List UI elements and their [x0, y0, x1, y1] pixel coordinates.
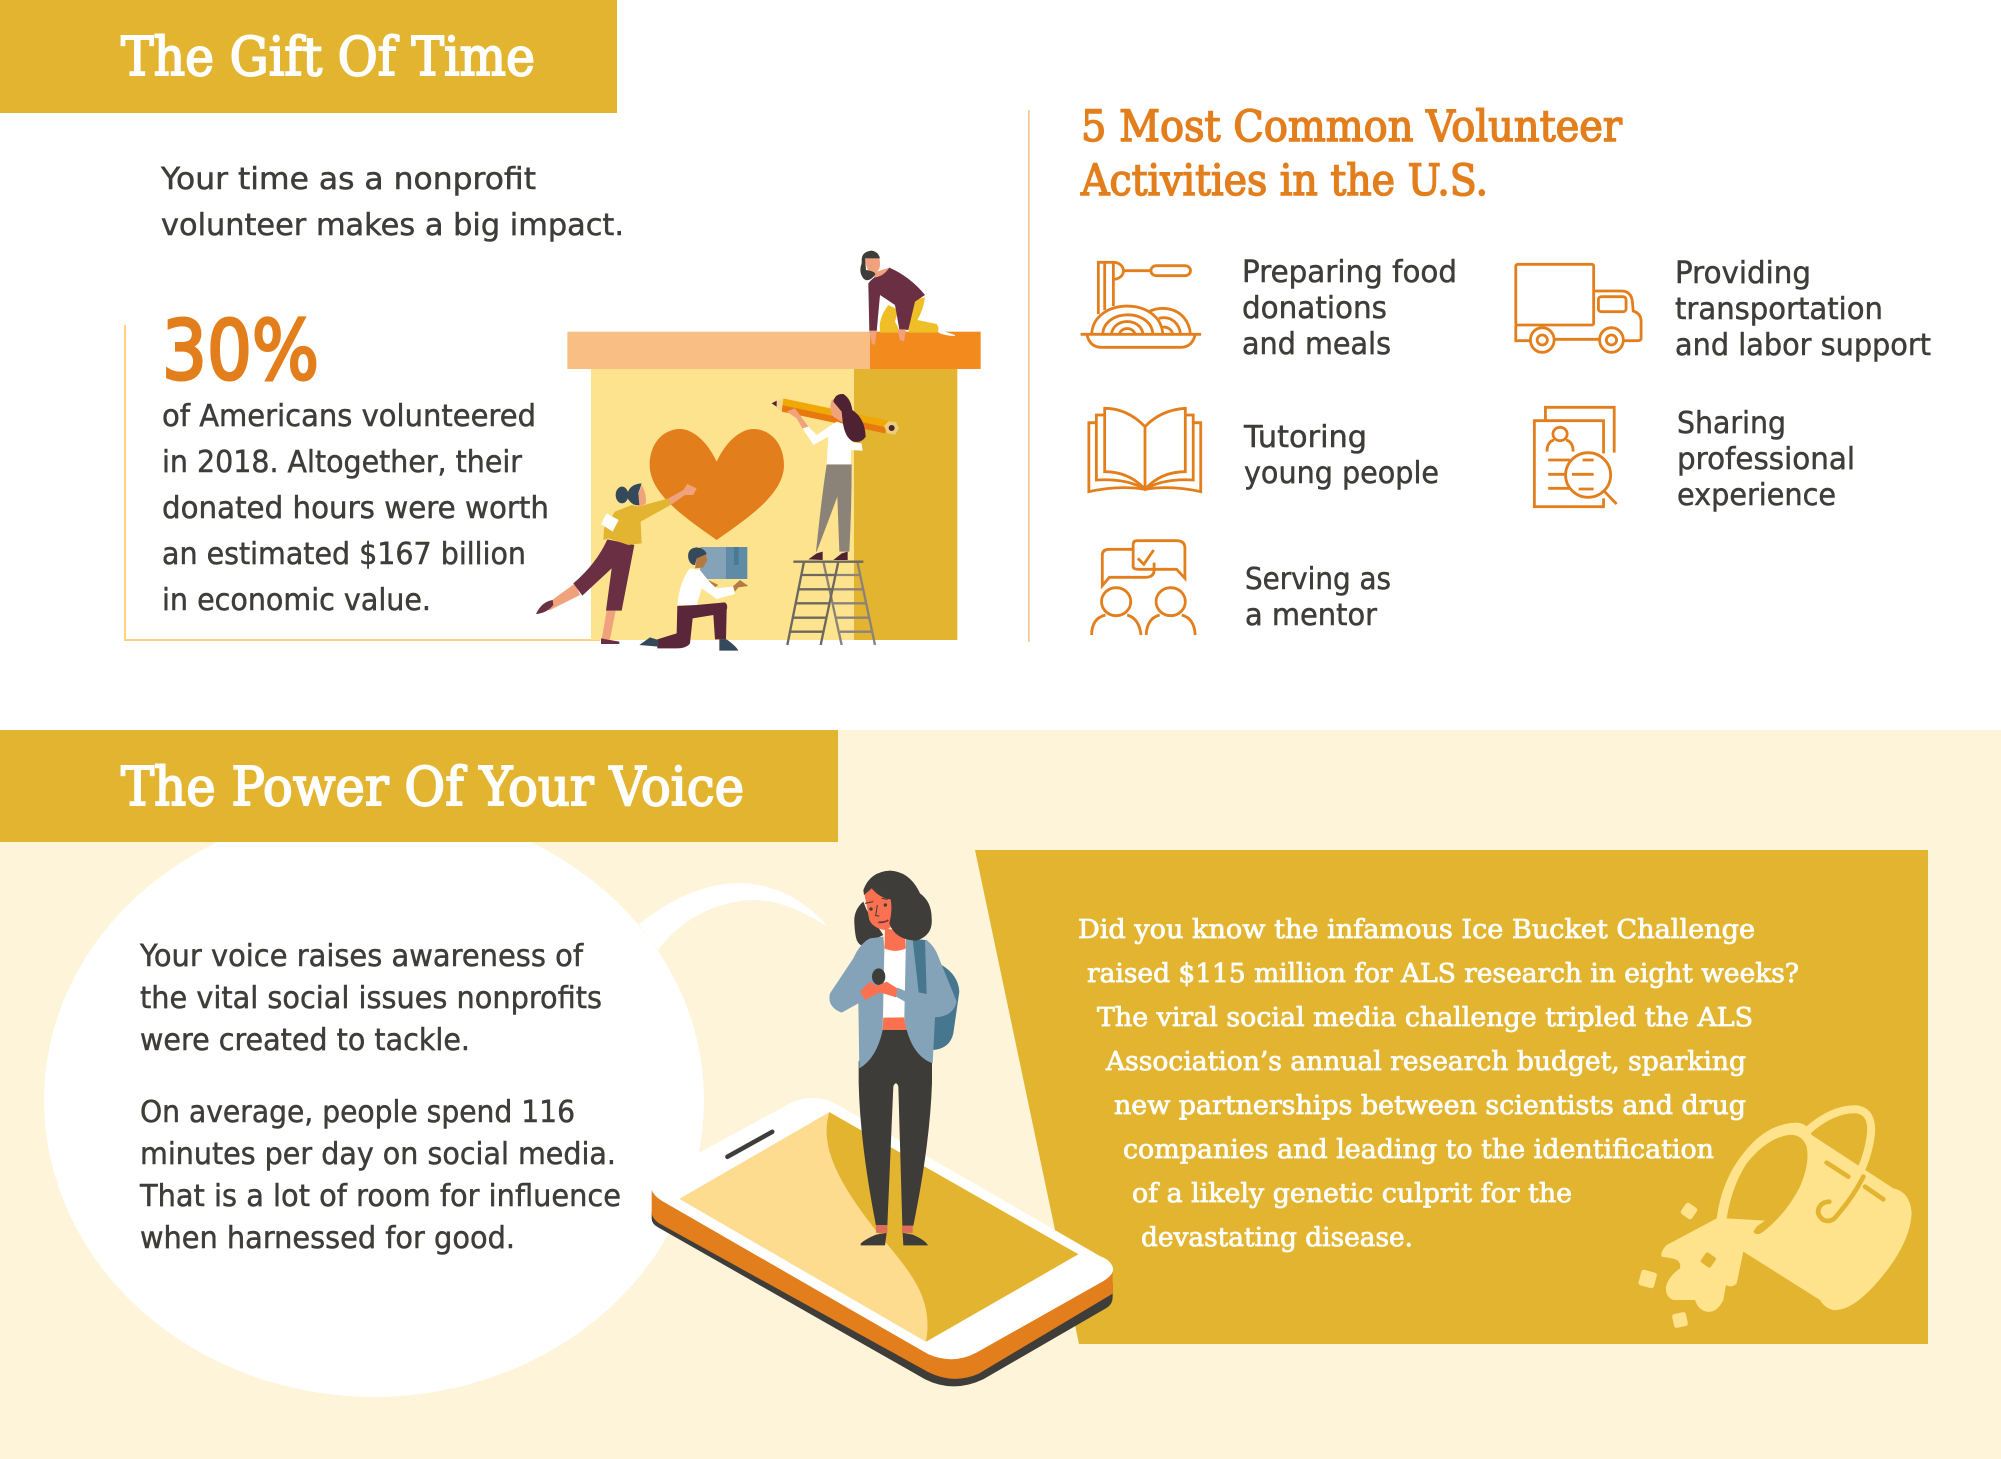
activity: providing transportation: and labor support: [1675, 328, 1931, 363]
activity: sharing experience: [1677, 406, 1855, 513]
callout text: ice bucket challenge: Did you know the infamous Ice Bucket Challenge: [1078, 914, 1755, 945]
statistic description: in 2018. Altogether, their: [162, 445, 522, 480]
heading banner: the power of your voice: [0, 730, 838, 842]
activity: tutoring: Tutoring: [1243, 420, 1367, 455]
icon: open book: [1089, 408, 1201, 492]
callout text: ice bucket challenge: devastating disease.: [1141, 1222, 1413, 1253]
illustration: volunteers building a house with a heart: [536, 251, 981, 651]
activity: tutoring: [1243, 420, 1439, 491]
callout text: ice bucket challenge: [1078, 914, 1799, 1253]
phone: [652, 1098, 1113, 1386]
heading banner: the power of your voice: The Power Of Your Voice: [121, 757, 744, 818]
woman: upper body: [829, 871, 959, 1068]
heading: 5 most common volunteer activities: 5 Most Common Volunteer: [1081, 102, 1622, 152]
callout text: ice bucket challenge: raised $115 million for ALS research in eight weeks?: [1087, 958, 1799, 989]
statistic description: [162, 399, 549, 618]
activity: sharing experience: professional: [1677, 442, 1855, 477]
heading: 5 most common volunteer activities: Activities in the U.S.: [1080, 156, 1488, 206]
activity: serving as a mentor: [1245, 562, 1391, 633]
intro text: Your time as a nonprofit: [160, 162, 536, 197]
icon: tipping bucket: [1638, 1109, 1912, 1328]
activity: providing transportation: Providing: [1675, 256, 1811, 291]
vertical divider: [1028, 110, 1030, 642]
voice text block: were created to tackle.: [140, 1023, 470, 1058]
icon: mentor and speech bubbles: [1092, 541, 1195, 635]
activity: sharing experience: Sharing: [1677, 406, 1786, 441]
statistic description: donated hours were worth: [162, 491, 549, 526]
icon: truck: [1516, 264, 1641, 352]
ladder: [787, 562, 875, 645]
intro text: [160, 162, 624, 243]
heading banner: the gift of time: The Gift Of Time: [121, 27, 535, 88]
voice text block: That is a lot of room for influence: [139, 1179, 621, 1214]
voice text block: On average, people spend 116: [140, 1095, 575, 1130]
activity: sharing experience: experience: [1677, 478, 1836, 513]
voice text block: Your voice raises awareness of: [139, 939, 584, 974]
activity: providing transportation: transportation: [1675, 292, 1883, 327]
statistic description: of Americans volunteered: [162, 399, 536, 434]
house wall: [591, 369, 957, 640]
person lifting box: [639, 547, 748, 651]
person on ladder: [787, 394, 866, 560]
person reaching for heart: [536, 483, 697, 644]
activity: preparing food: and meals: [1242, 327, 1391, 362]
heading: 5 most common volunteer activities: [1080, 102, 1622, 206]
activity: tutoring: young people: [1244, 456, 1439, 491]
statistic description: in economic value.: [162, 583, 431, 618]
callout text: ice bucket challenge: The viral social media challenge tripled the ALS: [1097, 1002, 1753, 1033]
heading banner: the gift of time: [0, 0, 617, 113]
activity: serving as a mentor: a mentor: [1245, 598, 1377, 633]
person on roof: [860, 251, 955, 345]
activity: preparing food: donations: [1242, 291, 1387, 326]
voice text block: the vital social issues nonprofits: [140, 981, 602, 1016]
statistic description: an estimated $167 billion: [162, 537, 526, 572]
section background: power of your voice: [0, 730, 2001, 1459]
house roof: [567, 332, 981, 369]
bracket line around statistic: [125, 325, 600, 640]
callout panel: [975, 850, 1928, 1344]
speech bubble: [44, 807, 828, 1397]
voice text block: [139, 939, 621, 1256]
pencil: [772, 398, 899, 435]
statistic: 30%: 30%: [162, 304, 319, 399]
woman: legs: [859, 1029, 932, 1245]
callout text: ice bucket challenge: companies and leading to the identification: [1123, 1134, 1714, 1165]
callout text: ice bucket challenge: Association’s annual research budget, sparking: [1105, 1046, 1746, 1077]
activity: preparing food: Preparing food: [1242, 255, 1457, 290]
heart: [650, 429, 784, 540]
icon: noodles bowl: [1081, 262, 1201, 347]
icon: resume with magnifier: [1534, 407, 1617, 507]
illustration: woman with microphone standing on phone: [652, 871, 1113, 1386]
activity: preparing food: [1242, 255, 1457, 362]
voice text block: minutes per day on social media.: [140, 1137, 616, 1172]
intro text: volunteer makes a big impact.: [161, 208, 624, 243]
callout text: ice bucket challenge: of a likely genetic culprit for the: [1132, 1178, 1572, 1209]
activity: serving as a mentor: Serving as: [1245, 562, 1391, 597]
callout text: ice bucket challenge: new partnerships between scientists and drug: [1114, 1090, 1746, 1121]
voice text block: when harnessed for good.: [140, 1221, 515, 1256]
activity: providing transportation: [1675, 256, 1931, 363]
